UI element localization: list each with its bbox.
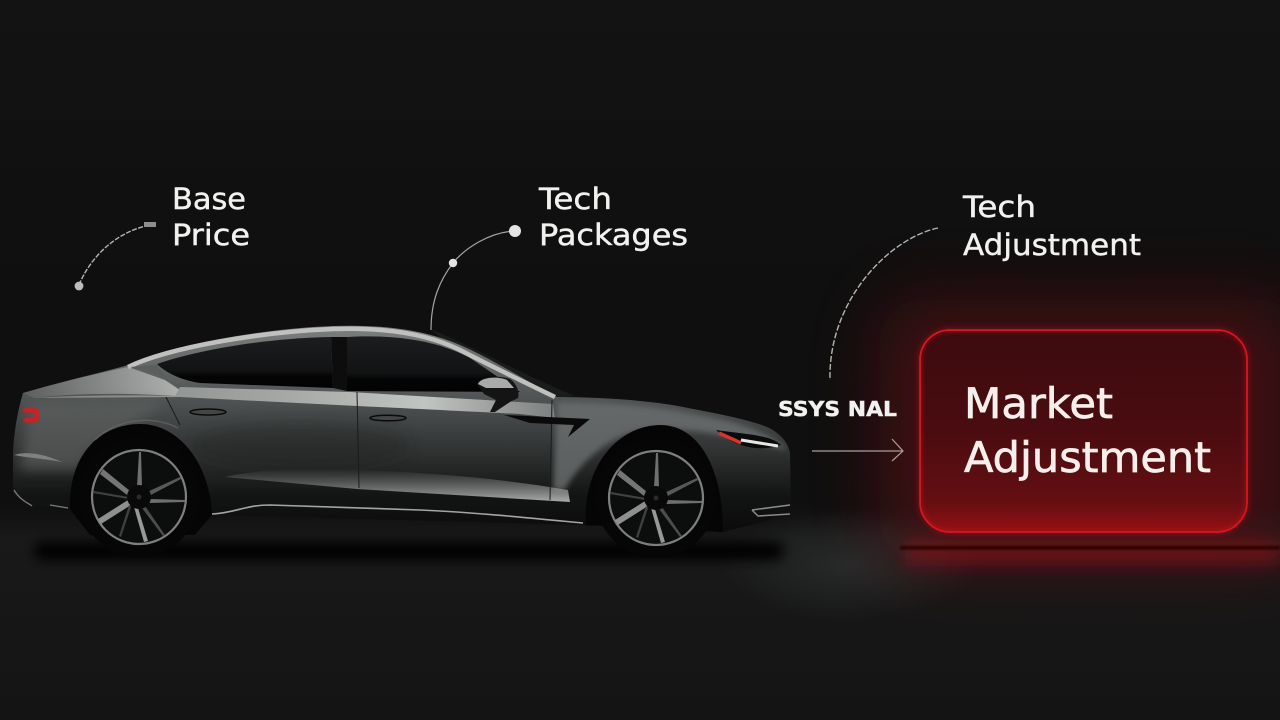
front window — [347, 336, 520, 392]
infographic — [0, 186, 1280, 617]
label: tech packages: Tech — [538, 182, 612, 216]
front wheel arch — [586, 425, 723, 532]
mirror — [477, 377, 519, 412]
label: tech adjustment — [830, 190, 1141, 380]
windshield — [430, 329, 575, 400]
shoulder highlight — [34, 387, 555, 418]
car body — [13, 326, 791, 532]
sill line — [212, 505, 583, 523]
door lines — [166, 392, 552, 500]
label: seasonal: SSYS NAL — [778, 397, 897, 421]
arch highlight — [95, 420, 178, 440]
panel heading: Market — [964, 379, 1113, 428]
front handle — [370, 415, 406, 421]
tech adjustment leader — [830, 228, 938, 380]
front wheel — [596, 438, 716, 558]
soft body lights — [20, 367, 788, 502]
rear handle — [190, 409, 226, 415]
label: base price: Base — [172, 182, 246, 216]
panel heading: Adjustment — [964, 433, 1211, 482]
rear window wedge — [130, 365, 168, 378]
floor reflection line — [900, 540, 1280, 566]
front fender light — [553, 402, 788, 490]
rear window — [157, 337, 333, 388]
front bumper intake — [752, 505, 790, 516]
floor glow — [720, 510, 980, 620]
floor — [0, 505, 1280, 720]
base price leader — [75, 222, 156, 290]
roof highlight — [128, 329, 555, 397]
tech packages leader — [431, 225, 521, 330]
label: tech adjustment: Adjustment — [963, 228, 1141, 262]
panel: market adjustment — [920, 330, 1247, 532]
car shadow — [34, 542, 784, 560]
rear wheel — [79, 437, 199, 557]
pillar — [331, 337, 347, 391]
label: tech packages — [431, 182, 688, 330]
lower door highlight — [225, 469, 570, 502]
label: base price — [75, 182, 250, 290]
headlight — [716, 430, 781, 448]
red glow behind panel — [880, 300, 1280, 560]
arrow — [812, 439, 903, 461]
car — [13, 326, 791, 558]
rear deck light — [23, 367, 180, 398]
tail lamp — [23, 410, 38, 420]
rear quarter light — [20, 400, 165, 470]
rear bumper — [14, 490, 68, 508]
fender vent — [504, 415, 590, 437]
rear wheel arch — [70, 424, 212, 535]
label: tech adjustment: Tech — [962, 190, 1036, 224]
label: tech packages: Packages — [539, 218, 688, 252]
door shadow — [204, 425, 396, 450]
label: base price: Price — [172, 218, 250, 252]
rear bumper crease — [14, 453, 62, 462]
